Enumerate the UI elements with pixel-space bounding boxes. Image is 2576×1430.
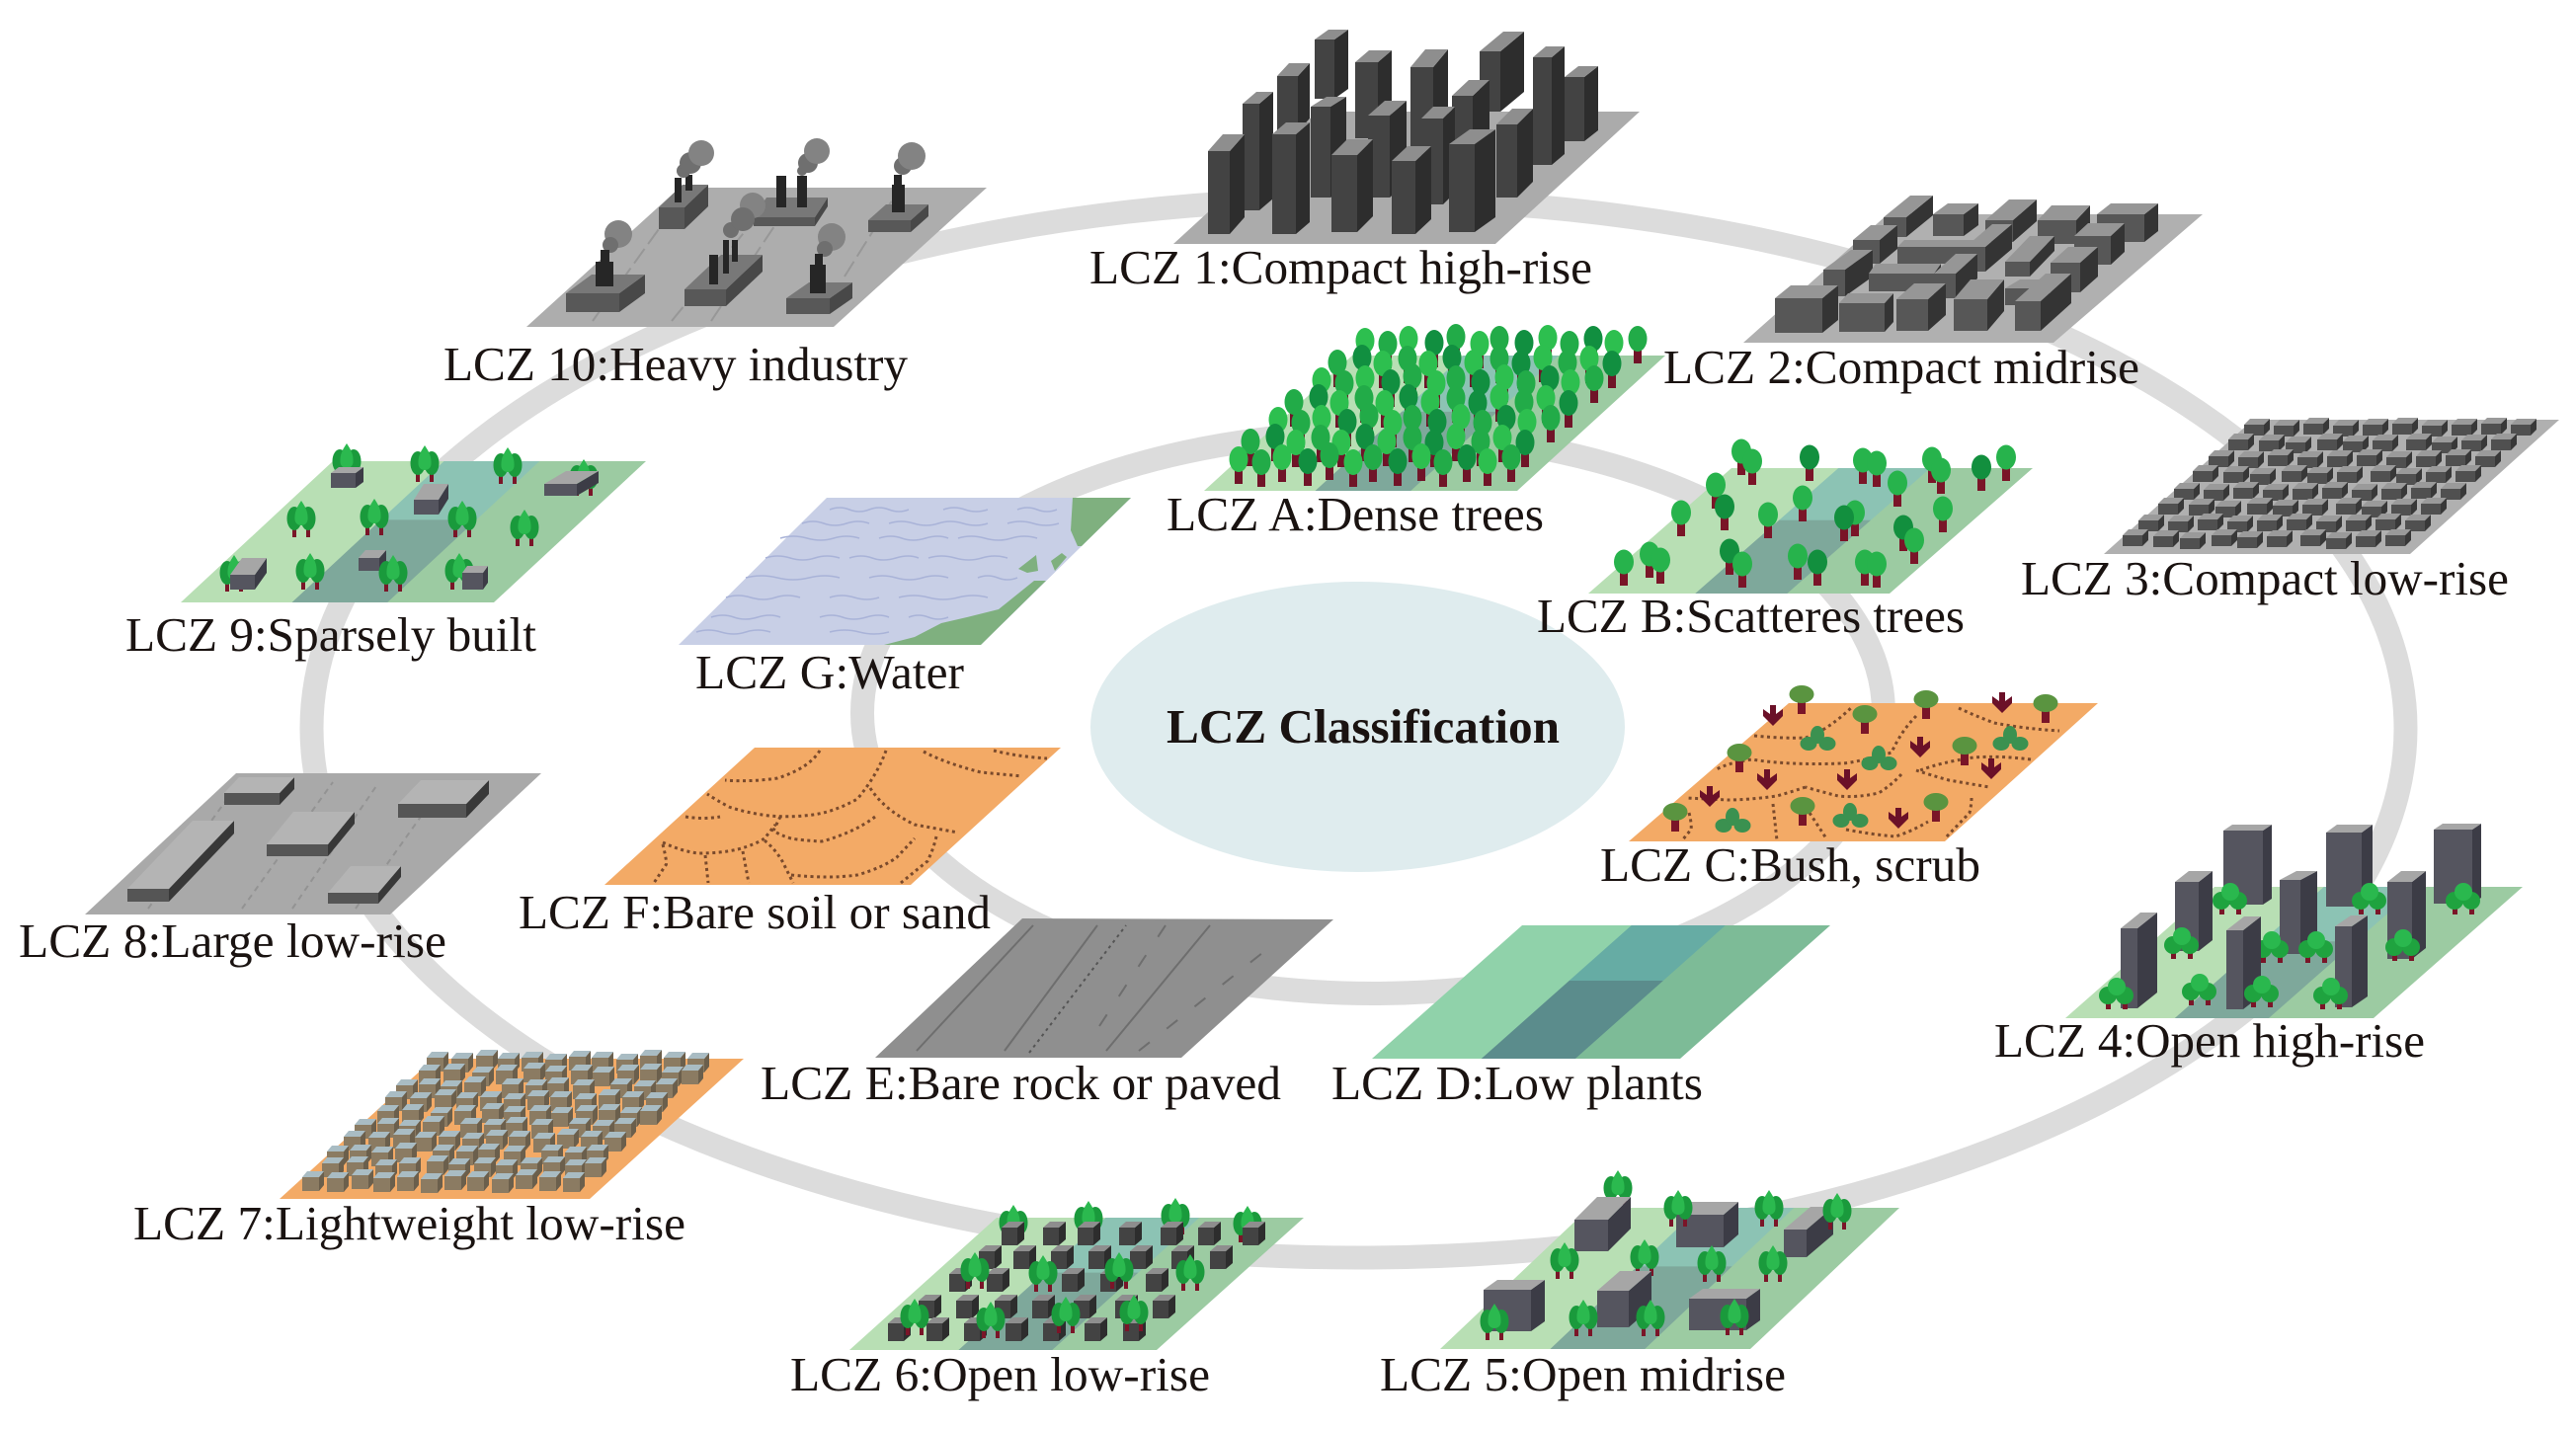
panel: LCZ 7 lightweight low-rise — [133, 1050, 744, 1250]
ground plane — [2104, 420, 2559, 554]
ground plane — [280, 1059, 744, 1199]
label: LCZ 10:Heavy industry — [443, 337, 909, 391]
dense tree grid — [1229, 324, 1648, 487]
label: LCZ 3:Compact low-rise — [2021, 551, 2509, 605]
low-rise building grid — [2123, 418, 2536, 549]
ground plane — [1440, 1208, 1899, 1349]
water plane — [679, 498, 1131, 645]
ground plane — [875, 918, 1333, 1058]
scattered trees — [1614, 438, 2016, 588]
panel: LCZ A dense trees — [1167, 324, 1665, 541]
ground plane — [849, 1218, 1304, 1350]
panel: LCZ 3 compact low-rise — [2021, 418, 2559, 605]
label: LCZ 8:Large low-rise — [19, 914, 446, 968]
ground plane — [1173, 112, 1640, 244]
panel: LCZ 6 open low-rise — [790, 1198, 1304, 1401]
water ripples — [696, 508, 1059, 634]
panel: LCZ 5 open midrise — [1380, 1170, 1899, 1401]
factories with chimneys and smoke — [566, 138, 928, 314]
label: LCZ 6:Open low-rise — [790, 1347, 1210, 1401]
ground plane — [526, 188, 987, 327]
label: LCZ 4:Open high-rise — [1994, 1013, 2425, 1068]
outer ring — [312, 199, 2406, 1258]
dotted soil lines — [1682, 706, 2059, 840]
ground plane — [85, 773, 541, 914]
trees — [1663, 685, 2058, 832]
label: LCZ E:Bare rock or paved — [761, 1056, 1281, 1110]
panel: LCZ C bush, scrub — [1600, 685, 2098, 892]
ground plane — [181, 461, 646, 602]
panel: LCZ 1 compact high-rise — [1089, 30, 1640, 294]
panel: LCZ E bare rock or paved — [761, 918, 1333, 1110]
ground plane — [1372, 925, 1830, 1059]
label: LCZ 9:Sparsely built — [125, 607, 536, 662]
shrubs — [1700, 692, 2012, 829]
high-rise buildings — [1208, 30, 1598, 234]
dotted soil arcs — [654, 751, 1047, 883]
label: LCZ C:Bush, scrub — [1600, 837, 1980, 892]
buildings and trees — [2099, 824, 2481, 1009]
panel: LCZ F bare soil or sand — [519, 748, 1061, 939]
label: LCZ G:Water — [695, 645, 964, 699]
ground plane — [604, 748, 1061, 885]
central ellipse: LCZ Classification — [1090, 582, 1625, 872]
shore land — [884, 498, 1131, 645]
label: LCZ A:Dense trees — [1167, 487, 1544, 541]
ground plane — [1743, 214, 2203, 343]
large low-rise buildings — [127, 777, 489, 904]
ground plane — [1204, 356, 1665, 491]
label: LCZ 1:Compact high-rise — [1089, 240, 1592, 294]
panel: LCZ 10 heavy industry — [443, 138, 987, 391]
buildings and trees — [1480, 1170, 1851, 1340]
ground plane — [2065, 887, 2523, 1018]
label: LCZ 5:Open midrise — [1380, 1347, 1786, 1401]
panel: LCZ 4 open high-rise — [1994, 824, 2523, 1068]
label: LCZ 2:Compact midrise — [1663, 340, 2139, 394]
label: LCZ B:Scatteres trees — [1537, 589, 1965, 643]
panel: LCZ 9 sparsely built — [125, 443, 646, 662]
lightweight building grid — [302, 1050, 709, 1193]
panel: LCZ B scattered trees — [1537, 438, 2033, 643]
road lines — [917, 925, 1267, 1053]
center title: LCZ Classification — [1167, 699, 1560, 754]
inner ring — [862, 433, 1884, 993]
bushes — [1715, 726, 2029, 833]
midrise buildings — [1775, 196, 2158, 333]
label: LCZ D:Low plants — [1331, 1056, 1703, 1110]
label: LCZ 7:Lightweight low-rise — [133, 1196, 685, 1250]
panel: LCZ D low plants — [1331, 925, 1830, 1110]
ground plane — [1588, 468, 2033, 594]
label: LCZ F:Bare soil or sand — [519, 885, 991, 939]
buildings and trees — [219, 443, 599, 592]
panel: LCZ 2 compact midrise — [1663, 196, 2203, 394]
panel: LCZ G water — [679, 498, 1131, 699]
buildings and trees — [888, 1198, 1265, 1341]
panel: LCZ 8 large low-rise — [19, 773, 541, 968]
ground plane — [1629, 703, 2098, 841]
